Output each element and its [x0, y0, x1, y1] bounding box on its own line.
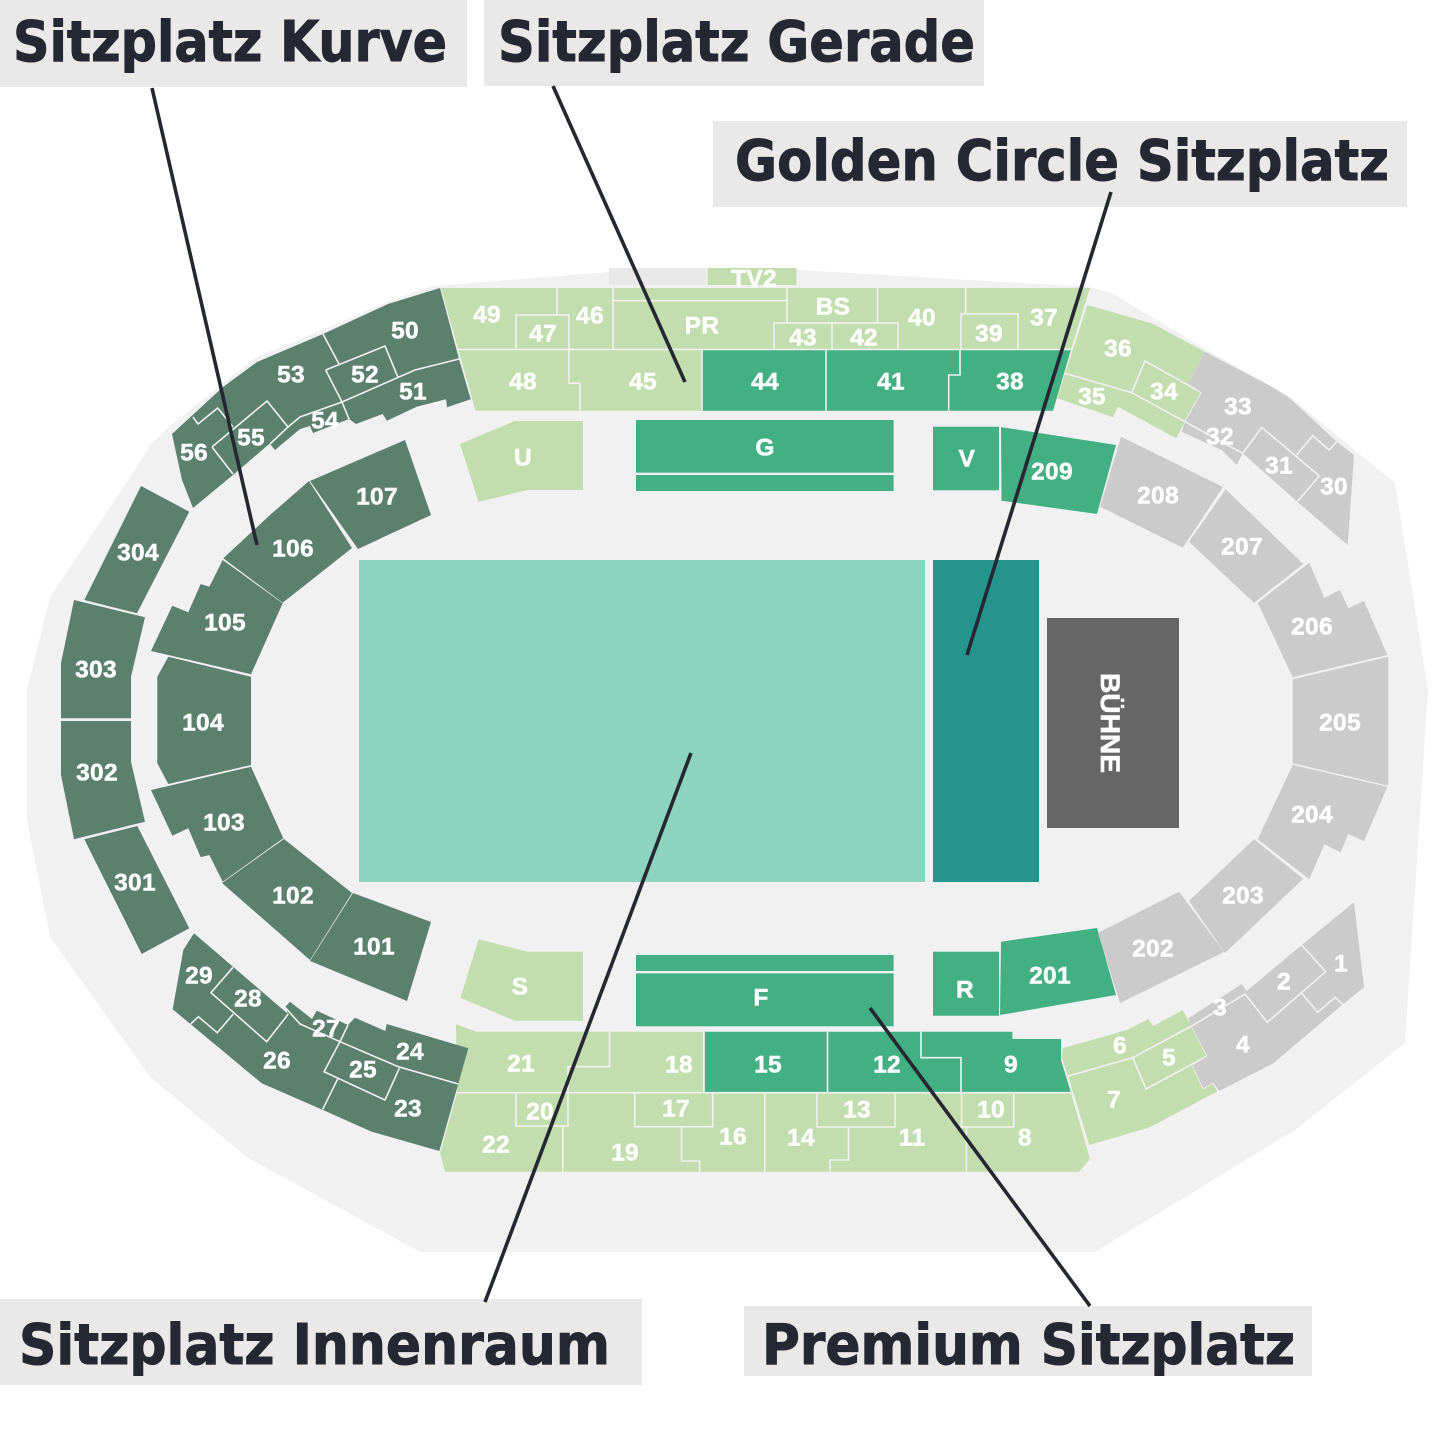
labels lower left curve: 29 — [185, 962, 213, 990]
labels upper left curve — [180, 318, 427, 466]
labels bottom grandstand: 13 — [843, 1096, 871, 1124]
section 106: 106 — [272, 536, 314, 562]
labels top grandstand: 43 — [789, 324, 817, 352]
section 103: 103 — [203, 810, 245, 836]
callout: Sitzplatz Gerade — [484, 0, 984, 86]
labels top grandstand: 48 — [509, 368, 537, 396]
section 102 — [222, 839, 352, 960]
premium sections 44 41 38 — [702, 350, 1071, 411]
section 303 — [61, 600, 145, 718]
labels top grandstand: 38 — [996, 368, 1024, 396]
labels bottom grandstand: 17 — [662, 1096, 690, 1122]
premium sections 15 12 9 — [704, 1032, 1071, 1093]
section 203 — [1189, 839, 1303, 953]
labels lower left curve: 28 — [234, 986, 262, 1012]
section 105: 105 — [204, 610, 246, 636]
labels lower left curve: 23 — [394, 1096, 422, 1122]
labels lower left curve: 25 — [349, 1056, 377, 1084]
labels upper left curve: 50 — [391, 318, 419, 344]
labels 36 34 35: 34 — [1150, 378, 1178, 406]
callout: Sitzplatz Kurve — [0, 0, 467, 87]
field: Golden Circle — [933, 560, 1039, 882]
block F — [636, 955, 894, 1026]
callout: Golden Circle Sitzplatz: Golden Circle Sitzplatz — [735, 129, 1389, 194]
section 206 — [1258, 563, 1387, 677]
field: Innenraum — [359, 560, 925, 882]
section 209 — [1001, 427, 1116, 514]
section 201: 201 — [1029, 962, 1071, 990]
labels 36 34 35: 35 — [1078, 384, 1106, 410]
labels bottom grandstand: 19 — [611, 1140, 639, 1166]
section 205: 205 — [1319, 710, 1361, 736]
labels top grandstand — [473, 266, 1058, 396]
labels 33 32 31 30: 31 — [1265, 452, 1293, 480]
section 304 — [84, 486, 189, 613]
labels bottom grandstand: 12 — [873, 1052, 901, 1078]
labels 3 4 2 1: 2 — [1277, 968, 1291, 996]
callout: Sitzplatz Kurve: Sitzplatz Kurve — [13, 10, 447, 75]
labels top grandstand: 46 — [576, 302, 604, 330]
labels lower left curve: 24 — [396, 1038, 424, 1066]
panel: lower right light sections — [1062, 1010, 1218, 1145]
section 103 — [151, 767, 283, 882]
panel: top grandstand — [441, 266, 1090, 411]
labels 33 32 31 30: 33 — [1224, 394, 1252, 420]
labels 6 5 7 — [1107, 1032, 1176, 1114]
labels top grandstand: 39 — [975, 320, 1003, 348]
section 207 — [1189, 489, 1303, 603]
block V — [933, 427, 999, 490]
labels top grandstand: 40 — [908, 304, 936, 332]
labels 6 5 7: 7 — [1107, 1086, 1121, 1114]
block F: F — [753, 984, 769, 1012]
section TV2 — [708, 268, 796, 285]
callout: Sitzplatz Innenraum: Sitzplatz Innenraum — [19, 1313, 610, 1378]
section 105 — [151, 560, 283, 674]
labels 33 32 31 30: 30 — [1320, 474, 1348, 500]
section 302: 302 — [76, 760, 118, 786]
block R: R — [956, 976, 974, 1004]
section 303: 303 — [75, 656, 117, 684]
section 301 — [84, 826, 189, 954]
labels top grandstand: 44 — [751, 368, 779, 396]
section 204 — [1258, 765, 1387, 879]
upper and lower light sections — [441, 288, 1090, 411]
labels upper left curve: 54 — [311, 408, 339, 434]
labels bottom grandstand: 22 — [482, 1132, 510, 1158]
section 209: 209 — [1031, 458, 1073, 486]
labels 6 5 7: 5 — [1162, 1044, 1176, 1072]
labels bottom grandstand: 18 — [665, 1052, 693, 1078]
panel: lower left curve — [173, 933, 468, 1151]
panel: bottom grandstand — [440, 1024, 1090, 1172]
section 106 — [223, 481, 352, 603]
block G: G — [755, 434, 775, 462]
labels bottom grandstand: 14 — [787, 1124, 815, 1152]
block G — [636, 420, 894, 491]
labels bottom grandstand — [482, 1050, 1032, 1166]
labels top grandstand: PR — [685, 312, 719, 340]
section 206: 206 — [1291, 614, 1333, 640]
labels top grandstand: 49 — [473, 302, 501, 328]
labels 36 34 35 — [1078, 336, 1178, 410]
labels upper left curve: 53 — [277, 362, 305, 388]
block S: S — [512, 974, 528, 1000]
section 208 — [1100, 437, 1223, 548]
section 302 — [61, 721, 145, 839]
labels 6 5 7: 6 — [1113, 1032, 1127, 1060]
labels bottom grandstand: 16 — [719, 1124, 747, 1150]
labels top grandstand: 37 — [1030, 304, 1058, 332]
section 202: 202 — [1132, 936, 1174, 962]
section 301: 301 — [114, 870, 156, 896]
section 101: 101 — [353, 934, 395, 960]
labels upper left curve: 56 — [180, 440, 208, 466]
labels bottom grandstand: 11 — [899, 1124, 925, 1152]
panel: lower right grey sections — [1188, 902, 1364, 1091]
leader line: Golden Circle — [967, 192, 1111, 655]
labels 3 4 2 1: 3 — [1213, 994, 1227, 1022]
labels 3 4 2 1: 1 — [1334, 950, 1348, 978]
section 304: 304 — [117, 540, 159, 566]
callout: Sitzplatz Gerade: Sitzplatz Gerade — [498, 10, 975, 75]
callout: Premium Sitzplatz: Premium Sitzplatz — [762, 1313, 1295, 1378]
section 208: 208 — [1137, 482, 1179, 510]
labels upper left curve: 51 — [399, 378, 427, 406]
leader line: Innenraum — [485, 753, 691, 1302]
panel: upper left curve — [172, 288, 471, 508]
labels 36 34 35: 36 — [1104, 336, 1132, 362]
section 101 — [310, 893, 431, 1001]
labels top grandstand: TV2 — [731, 266, 777, 292]
labels bottom grandstand: 8 — [1018, 1124, 1032, 1152]
section 205 — [1293, 657, 1388, 786]
labels lower left curve: 26 — [263, 1048, 291, 1074]
block R — [933, 952, 999, 1016]
section 107 — [310, 440, 431, 549]
leader line: Gerade — [553, 86, 685, 382]
section 202 — [1098, 892, 1224, 1003]
labels bottom grandstand: 9 — [1004, 1052, 1018, 1078]
panel: upper right light sections — [1057, 305, 1205, 438]
section 201 — [1000, 928, 1116, 1015]
labels lower left curve — [185, 962, 424, 1122]
labels top grandstand: 47 — [529, 320, 557, 348]
block S — [460, 939, 583, 1021]
block U: U — [514, 444, 532, 472]
leader line: Kurve — [152, 88, 257, 545]
labels lower left curve: 27 — [312, 1016, 340, 1042]
block V: V — [959, 446, 976, 472]
section 102: 102 — [272, 882, 314, 910]
stage: BÜHNE — [1095, 673, 1125, 773]
leader line: Premium — [870, 1008, 1090, 1306]
labels bottom grandstand: 20 — [526, 1098, 554, 1126]
labels upper left curve: 52 — [351, 362, 379, 388]
section 104 — [157, 657, 251, 784]
labels 33 32 31 30: 32 — [1206, 424, 1234, 450]
labels top grandstand: 41 — [877, 368, 905, 396]
section 203: 203 — [1222, 882, 1264, 910]
labels 3 4 2 1 — [1213, 950, 1348, 1058]
labels 3 4 2 1: 4 — [1236, 1032, 1250, 1058]
venue background — [27, 270, 1428, 1252]
section 107: 107 — [356, 484, 398, 510]
stage — [1047, 618, 1179, 828]
section 104: 104 — [182, 710, 224, 736]
labels bottom grandstand: 15 — [754, 1052, 782, 1078]
labels upper left curve: 55 — [237, 424, 265, 452]
labels bottom grandstand: 21 — [507, 1050, 535, 1078]
block U — [460, 421, 583, 502]
labels top grandstand: 45 — [629, 368, 657, 396]
panel: upper right grey sections — [1182, 352, 1354, 545]
labels top grandstand: BS — [816, 294, 850, 320]
labels top grandstand: 42 — [850, 324, 878, 352]
section 204: 204 — [1291, 802, 1333, 828]
labels 33 32 31 30 — [1206, 394, 1348, 500]
labels bottom grandstand: 10 — [977, 1096, 1005, 1124]
section 207: 207 — [1221, 534, 1263, 560]
